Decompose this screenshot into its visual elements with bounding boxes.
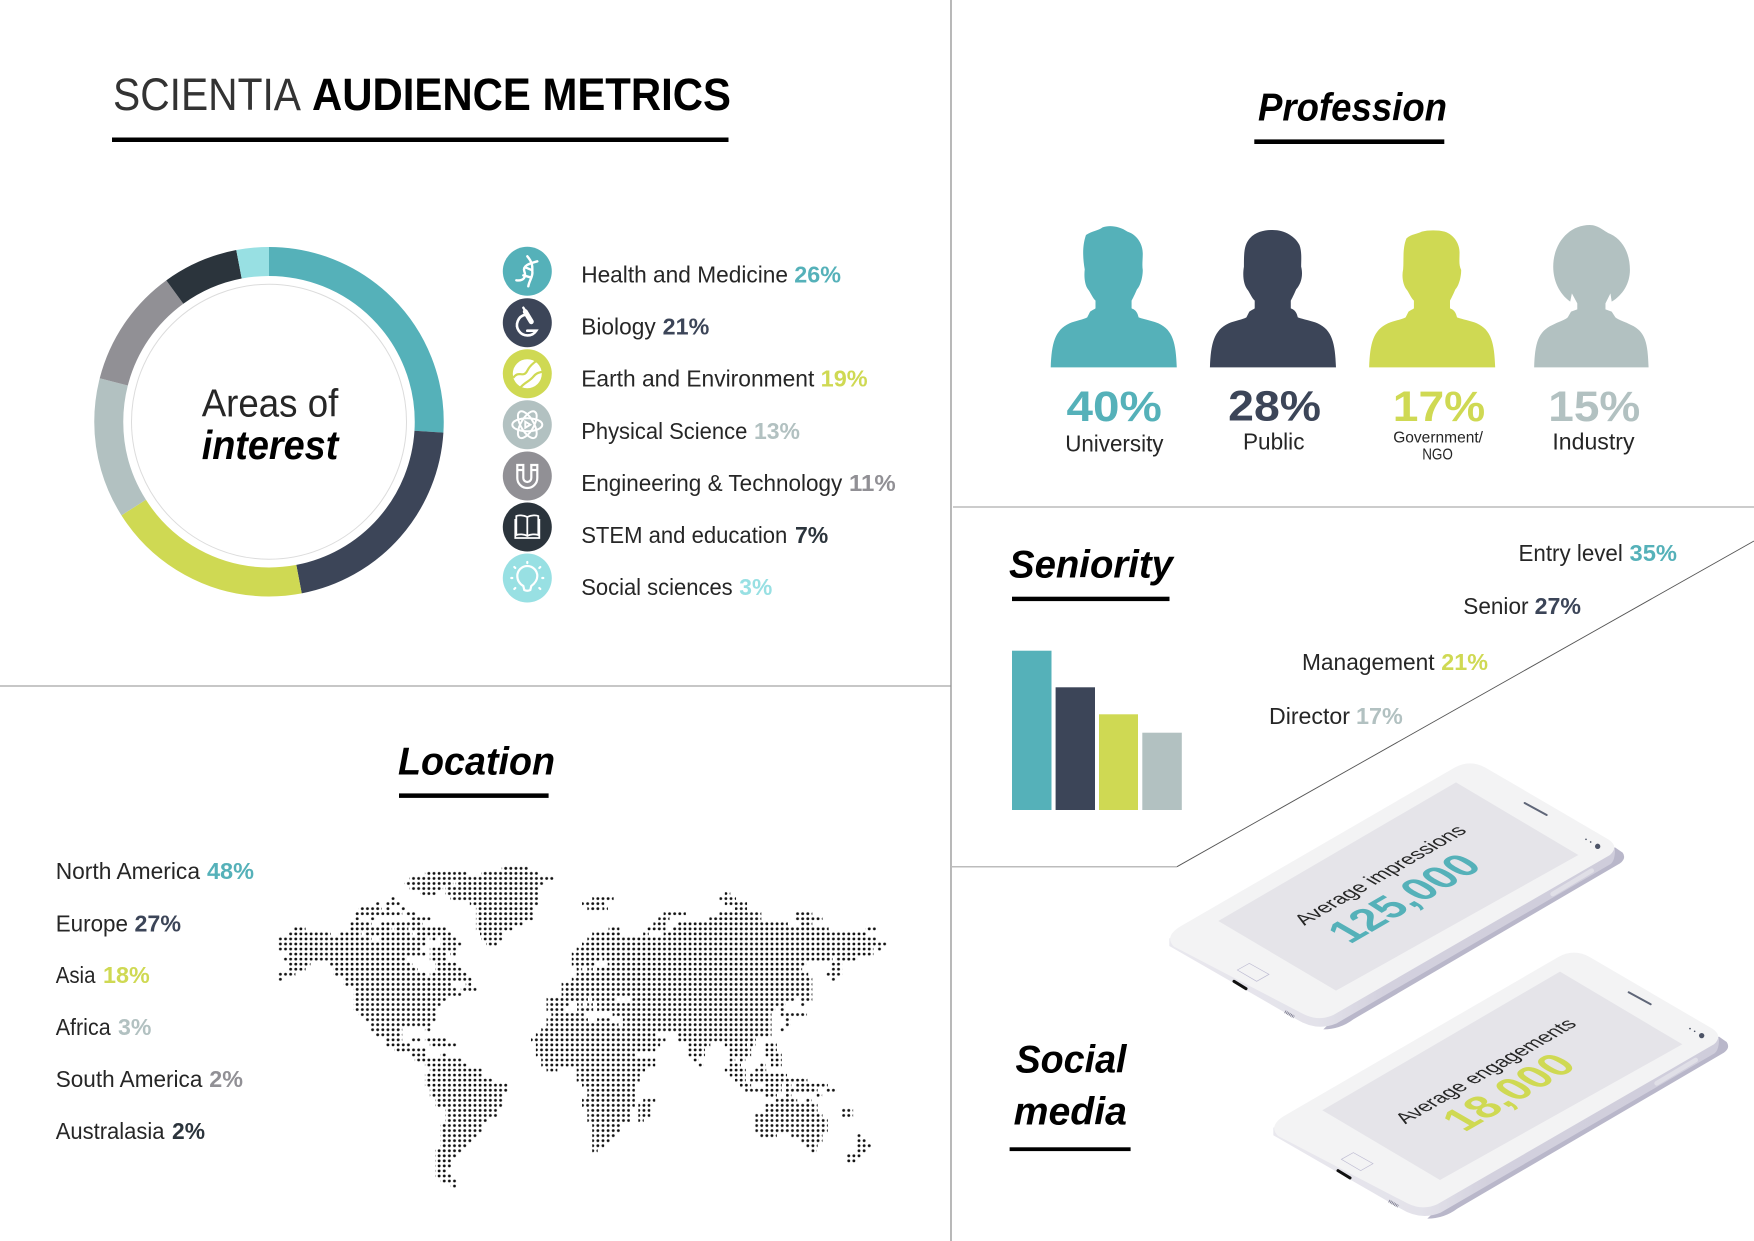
legend text: social sciences: 3% — [739, 574, 772, 600]
legend text: biology — [581, 314, 709, 340]
location list: Asia — [56, 962, 96, 988]
location list: Africa — [56, 1014, 111, 1040]
location list: South America — [56, 1066, 203, 1092]
location list: 2% — [172, 1118, 205, 1144]
label: entry level: 35% — [1630, 540, 1677, 566]
label: entry level — [1518, 540, 1677, 566]
label: director: Director — [1269, 703, 1350, 729]
location list: Australasia — [56, 1118, 165, 1144]
location list: 18% — [103, 962, 150, 988]
stat: public — [1228, 383, 1321, 454]
stat: public: Public — [1243, 428, 1304, 454]
location list: North America — [56, 858, 200, 884]
title — [112, 69, 731, 142]
legend text: earth and environment: Earth and Environment — [581, 366, 815, 392]
icon: industry person silhouette — [1534, 225, 1649, 367]
icon: atom — [503, 400, 552, 449]
label: management: 21% — [1441, 649, 1488, 675]
icon: university person silhouette — [1051, 226, 1177, 367]
legend text: stem and education: 7% — [795, 522, 828, 548]
label: senior — [1463, 593, 1581, 619]
title: SCIENTIA — [113, 69, 301, 120]
stat: industry — [1548, 383, 1640, 454]
dotted world map — [280, 868, 885, 1186]
label: management: Management — [1302, 649, 1435, 675]
icon: microscope — [503, 298, 552, 347]
bar chart — [1012, 651, 1182, 810]
icon: open book — [503, 502, 552, 552]
location list: 48% — [207, 858, 254, 884]
location list — [56, 858, 254, 1144]
legend text: physical science: 13% — [754, 418, 800, 444]
label: entry level: Entry level — [1518, 540, 1623, 566]
icon: government person silhouette — [1369, 230, 1495, 367]
phone: average impressions — [1169, 763, 1624, 1029]
stat: government ngo: Government/ — [1393, 430, 1484, 447]
stat: government ngo — [1393, 383, 1485, 463]
legend text: health and medicine: 26% — [794, 262, 841, 288]
panel: areas of interest donut chart: interest — [202, 422, 340, 468]
legend text: biology: Biology — [581, 314, 656, 340]
icon: earth — [503, 349, 552, 398]
location list: 2% — [209, 1066, 243, 1092]
phone: average impressions: Average impressions — [1289, 822, 1472, 928]
legend text: physical science: Physical Science — [581, 418, 747, 444]
stat: university: 40% — [1066, 383, 1162, 431]
panel: profession — [1051, 87, 1649, 463]
panel: location — [56, 740, 885, 1186]
label: senior: Senior — [1463, 593, 1529, 619]
icon: magnet — [503, 452, 552, 500]
stat: government ngo: 17% — [1393, 383, 1485, 431]
stat: public: 28% — [1228, 383, 1321, 431]
label: director: 17% — [1356, 703, 1403, 729]
heading: profession: Profession — [1258, 87, 1447, 130]
label: senior: 27% — [1535, 593, 1581, 619]
stat: university: University — [1065, 431, 1164, 457]
heading: social media: media — [1014, 1090, 1127, 1133]
legend text: social sciences: Social sciences — [581, 574, 733, 600]
legend text: engineering and technology: Engineering & Technology — [581, 470, 843, 496]
title: AUDIENCE METRICS — [312, 69, 731, 120]
stat: industry: 15% — [1548, 383, 1640, 431]
heading: seniority: Seniority — [1009, 543, 1175, 586]
heading: social media: Social — [1016, 1038, 1128, 1081]
panel: social media — [1010, 763, 1728, 1219]
phone: average engagements — [1273, 953, 1728, 1219]
legend text: engineering and technology: 11% — [849, 470, 896, 496]
legend text: stem and education: STEM and education — [581, 522, 787, 548]
panel: areas of interest donut chart: Areas of — [202, 383, 338, 426]
stat: government ngo: NGO — [1422, 446, 1453, 463]
phone: average engagements: 18,000 — [1431, 1047, 1587, 1138]
location list: Europe — [56, 910, 128, 936]
icon: public person silhouette — [1210, 230, 1336, 367]
heading: social media — [1010, 1038, 1131, 1151]
stat: industry: Industry — [1552, 428, 1635, 454]
panel: areas of interest legend — [503, 247, 896, 602]
location list: 27% — [134, 910, 181, 936]
panel: areas of interest donut chart — [109, 261, 429, 582]
legend text: biology: 21% — [663, 314, 709, 340]
label: director — [1269, 703, 1403, 729]
icon: light bulb — [503, 554, 552, 602]
heading: location: Location — [398, 740, 555, 784]
legend text: earth and environment: 19% — [821, 366, 868, 392]
phone: average impressions: 125,000 — [1316, 847, 1493, 950]
location list: 3% — [118, 1014, 151, 1040]
legend text: health and medicine: Health and Medicine — [581, 262, 788, 288]
stat: university — [1065, 383, 1164, 457]
phone: average engagements: Average engagements — [1390, 1016, 1582, 1127]
icon: dna — [503, 247, 552, 296]
panel: seniority — [1009, 540, 1677, 810]
